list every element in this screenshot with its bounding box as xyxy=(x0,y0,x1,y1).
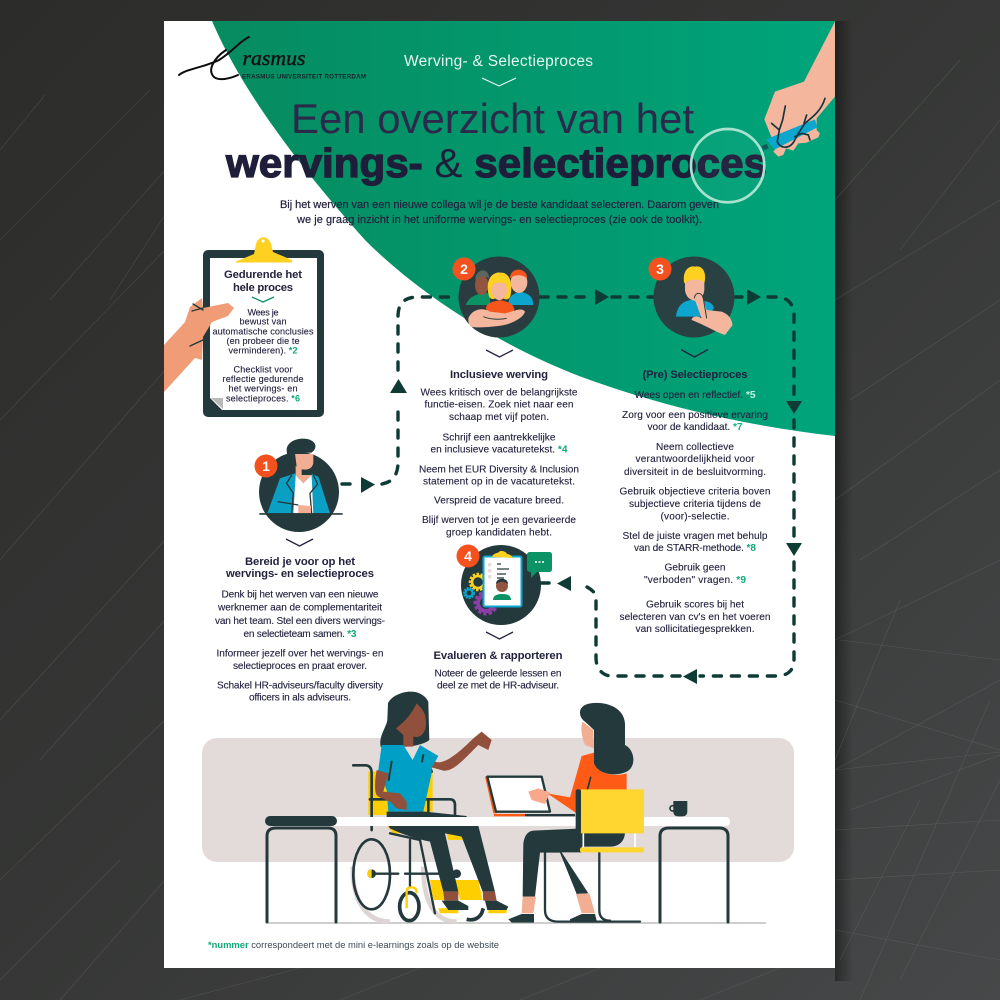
text block: step 2: schaap met vijf poten. xyxy=(449,412,549,423)
text block: step 1: Denk bij het werven van een nieuwe xyxy=(222,590,379,600)
icon: step 4 clipboard with gears and speech bubble xyxy=(461,545,552,625)
text block: step 2: Neem het EUR Diversity & Inclusion xyxy=(419,464,579,476)
number badge 1: 1 xyxy=(262,458,270,474)
text block: step 3: (voor)-selectie. xyxy=(660,512,730,522)
text block: step 4: deel ze met de HR-adviseur. xyxy=(437,680,559,692)
ground line xyxy=(268,922,766,924)
text block: step 3: Gebruik geen xyxy=(664,562,726,574)
clipboard text: (en probeer die te xyxy=(226,336,300,346)
logo: Erasmus Universiteit Rotterdam: ERASMUS UNIVERSITEIT ROTTERDAM xyxy=(242,74,366,80)
clipboard board xyxy=(203,250,324,417)
clipboard heading xyxy=(224,269,302,294)
number badge 3 xyxy=(648,258,672,280)
icon: step 3 person with pointing hand xyxy=(654,256,734,338)
number badge 2: 2 xyxy=(460,261,468,277)
text block: step 3: van de STARR-methode. *8 xyxy=(634,543,756,554)
logo: Erasmus Universiteit Rotterdam xyxy=(179,37,366,80)
text block: step 3: subjectieve criteria tijdens de xyxy=(629,499,761,510)
arrow: step 2 to step 3 xyxy=(540,289,654,305)
text block: step 3: verantwoordelijkheid voor xyxy=(636,454,755,465)
text block: step 3: Gebruik objectieve criteria boven xyxy=(620,486,770,498)
green curved background xyxy=(212,21,835,436)
text block: step 2 xyxy=(419,369,579,538)
clipboard text: Wees je xyxy=(248,308,278,318)
clipboard text: selectieproces. *6 xyxy=(226,394,300,404)
text block: step 3: voor de kandidaat. *7 xyxy=(648,422,743,433)
title: Een overzicht van het xyxy=(291,95,694,142)
text block: step 2: Wees kritisch over de belangrijkste xyxy=(420,388,578,398)
text block: step 3: diversiteit in de besluitvorming. xyxy=(624,467,766,478)
title: wervings- & selectieproces xyxy=(225,140,767,186)
icon: step 2 group of people with hand xyxy=(458,256,540,338)
text block: step 2: en inclusieve vacaturetekst. *4 xyxy=(430,444,568,456)
intro text: Bij het werven van een nieuwe collega wil je de beste kandidaat selecteren. Daarom geven xyxy=(280,199,719,211)
icon: hand holding clipboard xyxy=(164,298,234,392)
clipboard text: Checklist voor xyxy=(234,364,292,374)
illustration: meeting at a table xyxy=(202,692,794,924)
text block: step 3: (Pre) Selectieproces xyxy=(642,369,748,381)
text block: step 1: officers in als adviseurs. xyxy=(249,692,351,704)
text block: step 2: Blijf werven tot je een gevarieerde xyxy=(422,515,576,526)
chevron 3 xyxy=(681,350,708,357)
section label: Werving- & Selectieproces xyxy=(404,53,593,70)
text block: step 1: selectieproces en praat erover. xyxy=(233,661,367,672)
text block: step 4: Evalueren & rapporteren xyxy=(434,650,563,662)
number badge 4: 4 xyxy=(464,548,472,564)
text block: step 1: van het team. Stel een divers wervings- xyxy=(215,616,385,627)
text block: step 1: en selectieteam samen. *3 xyxy=(244,629,357,640)
text block: step 2: Inclusieve werving xyxy=(450,369,548,381)
text block: step 3: "verboden" vragen. *9 xyxy=(644,575,746,586)
number badge 3: 3 xyxy=(656,261,664,277)
text block: step 2: functie-eisen. Zoek niet naar een xyxy=(424,400,574,410)
text block: step 1: Bereid je voor op het xyxy=(245,556,355,568)
arrow: step 3 to step 4 xyxy=(541,289,802,684)
text block: step 2: Schrijf een aantrekkelijke xyxy=(442,432,556,444)
chevron 2 xyxy=(486,350,513,357)
clipboard paper xyxy=(210,258,317,410)
text block: step 3: Stel de juiste vragen met behulp xyxy=(622,531,768,542)
chevron 4 xyxy=(486,632,513,639)
panel: clipboard gedurende het hele proces xyxy=(203,237,324,417)
text block: step 2: statement op in de vacaturetekst. xyxy=(423,476,575,488)
text block: step 3: selecteren van cv's en het voeren xyxy=(620,612,770,623)
number badge 2 xyxy=(452,258,476,280)
text block: step 3: Zorg voor een positieve ervaring xyxy=(622,410,768,421)
text block: step 1 xyxy=(215,556,385,704)
title xyxy=(225,95,767,186)
table legs xyxy=(267,828,728,922)
person: woman in wheelchair xyxy=(353,692,508,922)
text block: step 1: wervings- en selectieproces xyxy=(225,568,374,580)
icon: hand with marker and magnifier xyxy=(691,22,835,202)
text block: step 1: Informeer jezelf over het wervings- en xyxy=(216,648,384,660)
text block: step 2: Verspreid de vacature breed. xyxy=(434,496,564,506)
text block: step 3: Gebruik scores bij het xyxy=(646,600,744,610)
chevron 1 xyxy=(286,539,313,546)
person: woman with laptop on yellow chair xyxy=(485,703,687,923)
text block: step 3: van sollicitatiegesprekken. xyxy=(636,624,754,635)
clipboard heading: hele proces xyxy=(233,282,293,294)
backdrop band xyxy=(202,738,794,862)
text block: step 4 xyxy=(434,650,563,692)
arrow: step 1 to step 2 xyxy=(342,297,458,493)
icon: step 1 person xyxy=(259,439,343,532)
logo: Erasmus Universiteit Rotterdam: rasmus xyxy=(242,48,306,70)
text block: step 3: Neem collectieve xyxy=(656,442,734,453)
clipboard text: bewust van xyxy=(240,316,286,326)
clipboard clip xyxy=(236,237,292,262)
clipboard text: reflectie gedurende xyxy=(222,374,304,384)
clipboard text: het wervings- en xyxy=(228,384,298,394)
clipboard text: verminderen). *2 xyxy=(228,346,298,356)
chevron: header xyxy=(482,78,516,86)
clipboard text: automatische conclusies xyxy=(212,326,314,336)
table top xyxy=(265,816,730,826)
text block: step 3: Wees open en reflectief. *5 xyxy=(634,390,756,401)
text block: step 2: groep kandidaten hebt. xyxy=(446,528,552,538)
clipboard heading: Gedurende het xyxy=(224,269,302,281)
text block: step 1: Schakel HR-adviseurs/faculty diversity xyxy=(217,680,384,692)
poster sheet xyxy=(164,21,835,968)
intro text xyxy=(280,199,719,226)
intro text: we je graag inzicht in het uniforme wervings- en selectieproces (zie ook de toolkit). xyxy=(296,214,702,226)
chevron xyxy=(252,297,274,302)
text block: step 1: werknemer aan de complementariteit xyxy=(217,602,382,614)
clipboard text xyxy=(212,308,314,404)
number badge 1 xyxy=(254,454,278,478)
text block: step 3 xyxy=(620,369,770,635)
number badge 4 xyxy=(456,544,480,568)
text block: step 4: Noteer de geleerde lessen en xyxy=(434,668,562,680)
footnote: *nummer correspondeert met de mini e-learnings zoals op de website xyxy=(208,939,499,950)
